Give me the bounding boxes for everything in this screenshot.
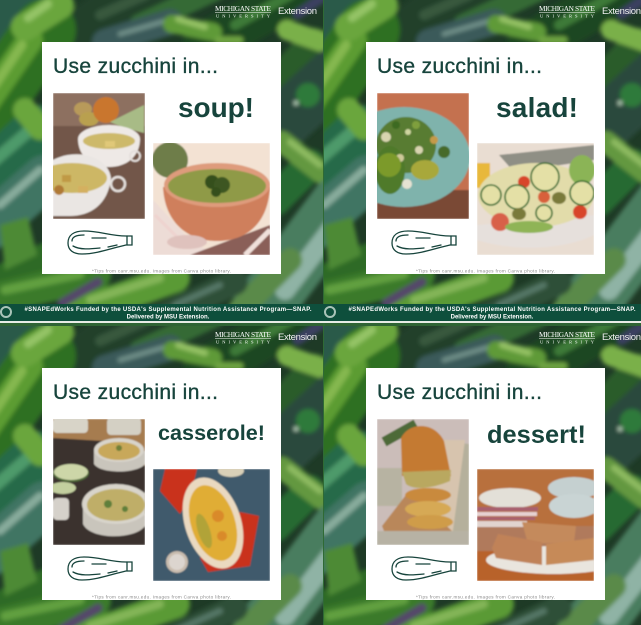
photo: zucchini ribbon salad [477, 143, 594, 255]
MSU Extension logo: Extension [278, 6, 317, 17]
white card [366, 42, 605, 274]
MSU Extension logo: MICHIGAN STATE [215, 330, 272, 339]
banner [0, 304, 323, 321]
photo: zucchini bread loaf [377, 419, 469, 545]
heading: Use zucchini in... [53, 381, 218, 404]
MSU Extension logo [215, 330, 317, 344]
heading: Use zucchini in... [377, 381, 542, 404]
credit: *Tips from canr.msu.edu. Images from Canva photo library. [92, 594, 231, 600]
MSU Extension logo: UNIVERSITY [540, 340, 595, 344]
icon: zucchini [392, 231, 456, 254]
credit: *Tips from canr.msu.edu. Images from Canva photo library. [416, 594, 555, 600]
MSU Extension logo [539, 330, 641, 344]
MSU Extension logo: MICHIGAN STATE [539, 4, 596, 13]
banner: Delivered by MSU Extension. [451, 314, 534, 320]
MSU Extension logo: MICHIGAN STATE [215, 4, 272, 13]
banner: #SNAPEdWorks Funded by the USDA's Supplemental Nutrition Assistance Program—SNAP. [24, 307, 312, 313]
MSU Extension logo: Extension [278, 332, 317, 343]
photo: gratin ramekins [53, 419, 145, 545]
MSU Extension logo: Extension [602, 6, 641, 17]
white card [42, 368, 281, 600]
MSU Extension logo: Extension [602, 332, 641, 343]
panel: soup tile [0, 0, 323, 321]
photo: salad on teal plate [377, 93, 469, 219]
MSU Extension logo [539, 4, 641, 18]
MSU Extension logo: UNIVERSITY [216, 14, 271, 18]
panel: casserole tile [0, 323, 323, 625]
panel: dessert tile [323, 323, 641, 625]
icon: zucchini [392, 557, 456, 580]
credit: *Tips from canr.msu.edu. Images from Canva photo library. [92, 268, 231, 274]
white card [366, 368, 605, 600]
heading: Use zucchini in... [53, 55, 218, 78]
label: soup: soup! [178, 92, 254, 123]
label: casserole: casserole! [158, 420, 265, 445]
MSU Extension logo: UNIVERSITY [540, 14, 595, 18]
label: dessert: dessert! [487, 421, 586, 449]
panel: salad tile [323, 0, 641, 321]
banner: Delivered by MSU Extension. [127, 314, 210, 320]
MSU Extension logo: MICHIGAN STATE [539, 330, 596, 339]
banner [323, 304, 641, 321]
white card [42, 42, 281, 274]
photo: casserole dish on blue table [153, 469, 270, 581]
photo: green soup in terracotta bowl [153, 143, 270, 255]
credit: *Tips from canr.msu.edu. Images from Canva photo library. [416, 268, 555, 274]
photo: zucchini bars on plate [477, 469, 594, 581]
MSU Extension logo [215, 4, 317, 18]
banner: #SNAPEdWorks Funded by the USDA's Supplemental Nutrition Assistance Program—SNAP. [348, 307, 636, 313]
icon: zucchini [68, 231, 132, 254]
MSU Extension logo: UNIVERSITY [216, 340, 271, 344]
heading: Use zucchini in... [377, 55, 542, 78]
photo: soups in white cups [53, 93, 145, 219]
icon: zucchini [68, 557, 132, 580]
label: salad: salad! [496, 92, 578, 123]
